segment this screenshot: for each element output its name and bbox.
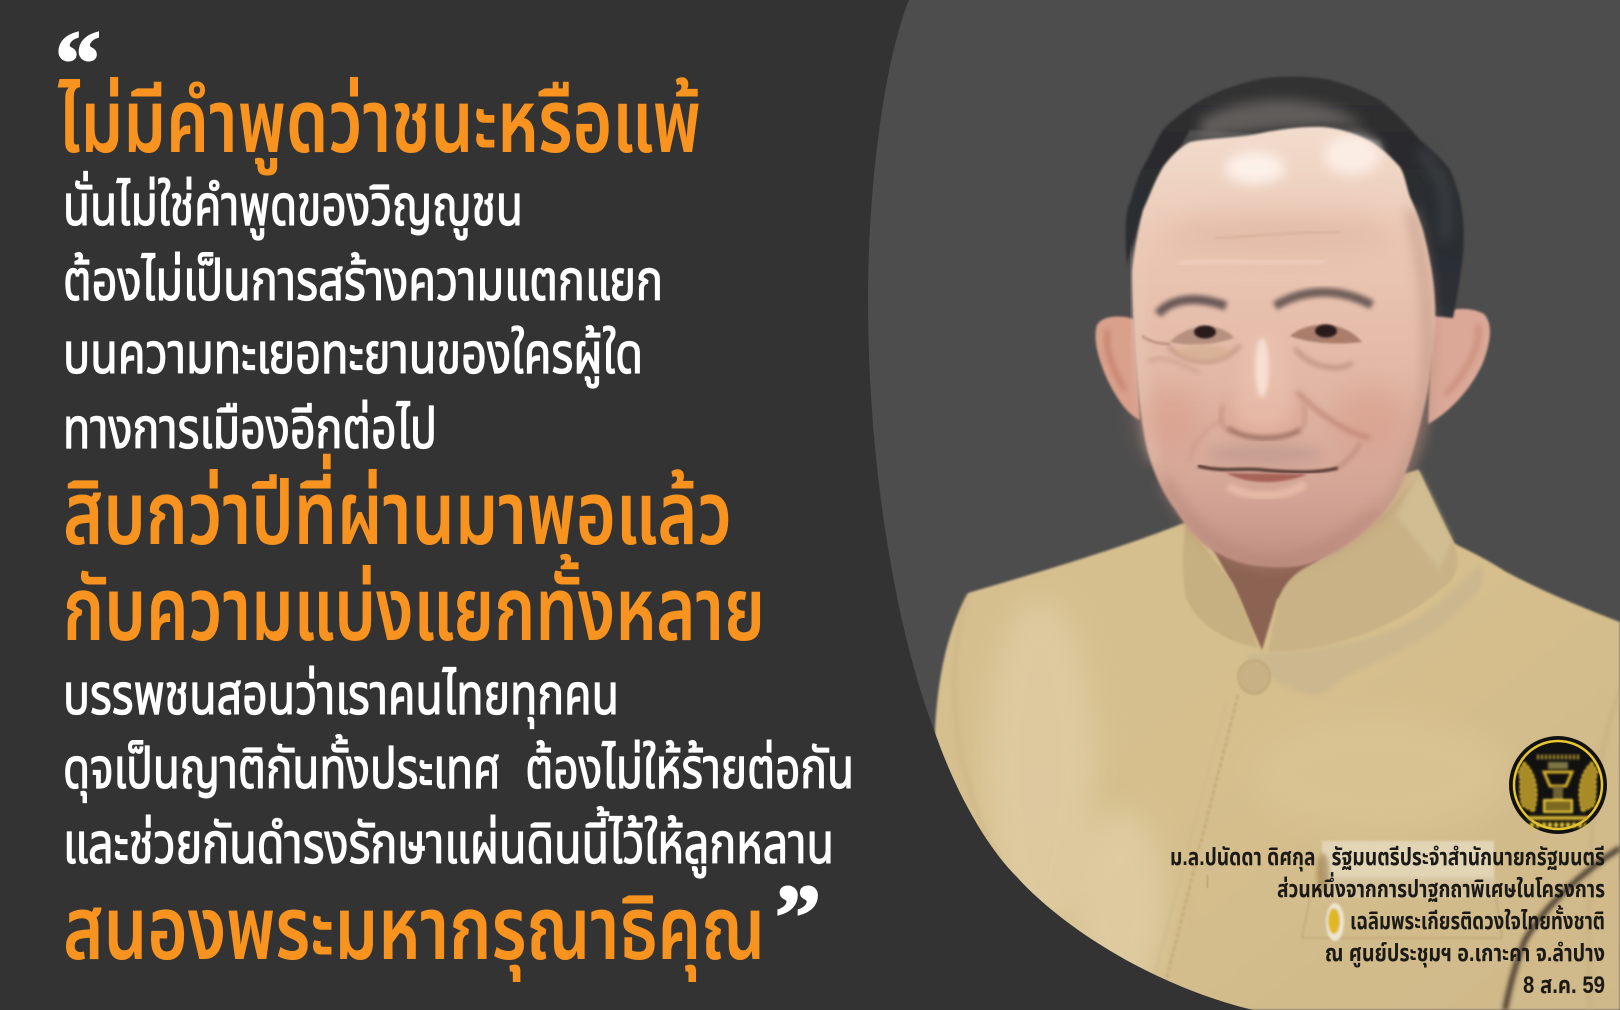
- quote body block two: บรรพชนสอนว่าเราคนไทยทุกคน: [63, 663, 619, 728]
- ears: [1095, 309, 1490, 424]
- neck opening: [1212, 550, 1320, 650]
- eyebrows: [1158, 292, 1372, 314]
- quote body block two: และช่วยกันดำรงรักษาแผ่นดินนี้ไว้ให้ลูกหลาน: [63, 806, 834, 878]
- nose: [1212, 337, 1370, 442]
- caption: source attribution: 8 ส.ค. 59: [1523, 972, 1605, 999]
- nasolabial folds: [1297, 392, 1370, 438]
- headline: no talk of winning or losing: ไม่มีคำพูดว่าชนะหรือแพ้: [57, 72, 701, 175]
- cheeks: [1140, 386, 1204, 454]
- grey hair sheen: [1200, 100, 1447, 240]
- quote body block one: นั่นไม่ใช่คำพูดของวิญญูชน: [63, 171, 523, 240]
- pocket seam: [1302, 897, 1502, 938]
- forehead highlights: [1160, 135, 1400, 264]
- dark jacket fold: [1505, 848, 1620, 1010]
- button lower: [1198, 852, 1200, 856]
- lighter curved panel: [868, 0, 1620, 1010]
- quote body block one: [63, 171, 663, 460]
- pocket highlight: [1322, 841, 1494, 897]
- upper lip shadow: [1207, 443, 1323, 465]
- face: [1132, 127, 1435, 567]
- quote body block two: ดุจเป็นญาติกันทั้งประเทศ ต้องไม่ให้ร้ายต่อกัน: [63, 734, 854, 802]
- top collar button: [1238, 660, 1270, 694]
- orange emphasis block: สิบกว่าปีที่ผ่านมาพอแล้ว: [63, 453, 732, 563]
- closing orange line: สนองพระมหากรุณาธิคุณ: [63, 879, 765, 982]
- gold lapel pin: [1326, 903, 1344, 941]
- face side shading: [1139, 210, 1428, 562]
- right sleeve seam: [1620, 690, 1621, 699]
- orange emphasis block: [63, 453, 765, 659]
- quote body block one: ทางการเมืองอีกต่อไป: [63, 397, 437, 460]
- shoulder yoke shading: [1245, 565, 1484, 695]
- caption: source attribution: [1170, 844, 1605, 999]
- placket seam: [1165, 695, 1238, 985]
- opening quotation mark: “: [55, 12, 101, 114]
- stand collar: [1183, 470, 1457, 652]
- closing quotation mark: ”: [775, 866, 821, 968]
- eyes: [1142, 324, 1362, 372]
- seal crest: [1518, 757, 1598, 825]
- jacket: [920, 470, 1620, 1010]
- quote body block one: บนความทะเยอทะยานของใครผู้ใด: [63, 322, 643, 388]
- mouth: [1198, 443, 1360, 496]
- quote body block two: [63, 663, 854, 878]
- orange emphasis block: กับความแบ่งแยกทั้งหลาย: [63, 553, 765, 659]
- quote body block one: ต้องไม่เป็นการสร้างความแตกแยก: [63, 249, 663, 312]
- head hair: [1126, 77, 1464, 318]
- government seal: [1509, 736, 1607, 834]
- portrait of the minister: [920, 77, 1620, 1010]
